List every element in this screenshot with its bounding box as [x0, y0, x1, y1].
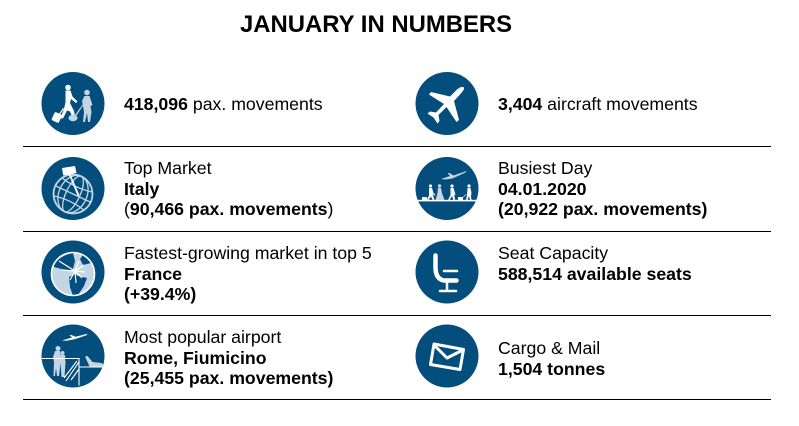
stat: busiest day: Busiest Day: [498, 158, 592, 178]
icon: aircraft: [416, 72, 478, 135]
icon: airport viewers: [42, 324, 104, 388]
stat: most popular airport: Rome, Fiumicino: [124, 348, 266, 368]
stat: fastest-growing market: Fastest-growing market in top 5: [124, 243, 372, 263]
title: JANUARY IN NUMBERS: [240, 11, 512, 38]
icon: envelope: [416, 324, 478, 388]
icon: busiest day people: [416, 157, 478, 220]
stat: most popular airport: (25,455 pax. movements): [124, 368, 333, 388]
stat: aircraft movements: 3,404 aircraft movements: [498, 94, 698, 114]
stat: busiest day: (20,922 pax. movements): [498, 199, 707, 219]
stat: seat capacity: Seat Capacity: [498, 243, 608, 263]
stat: busiest day: 04.01.2020: [498, 178, 587, 198]
stat: passenger movements: 418,096 pax. movements: [124, 94, 323, 114]
stat: top market: [124, 158, 333, 219]
stat: top market: Italy: [124, 178, 159, 198]
stat: fastest-growing market: France: [124, 264, 182, 284]
stat: top market: (90,466 pax. movements): [124, 199, 333, 219]
stat: fastest-growing market: (+39.4%): [124, 284, 196, 304]
stat: fastest-growing market: [124, 243, 372, 304]
stat: most popular airport: Most popular airport: [124, 327, 281, 347]
stat: seat capacity: [498, 243, 692, 284]
stat: cargo and mail: [498, 338, 605, 378]
icon: globe with routes: [42, 240, 104, 304]
stat: top market: Top Market: [124, 158, 212, 178]
stat: cargo and mail: Cargo & Mail: [498, 338, 600, 358]
icon: seat: [416, 240, 478, 304]
stat: seat capacity: 588,514 available seats: [498, 264, 692, 284]
icon: passengers: [42, 72, 104, 135]
stat: busiest day: [498, 158, 707, 219]
stat: cargo and mail: 1,504 tonnes: [498, 358, 605, 378]
stat: most popular airport: [124, 327, 333, 388]
icon: globe with flag: [42, 157, 104, 220]
